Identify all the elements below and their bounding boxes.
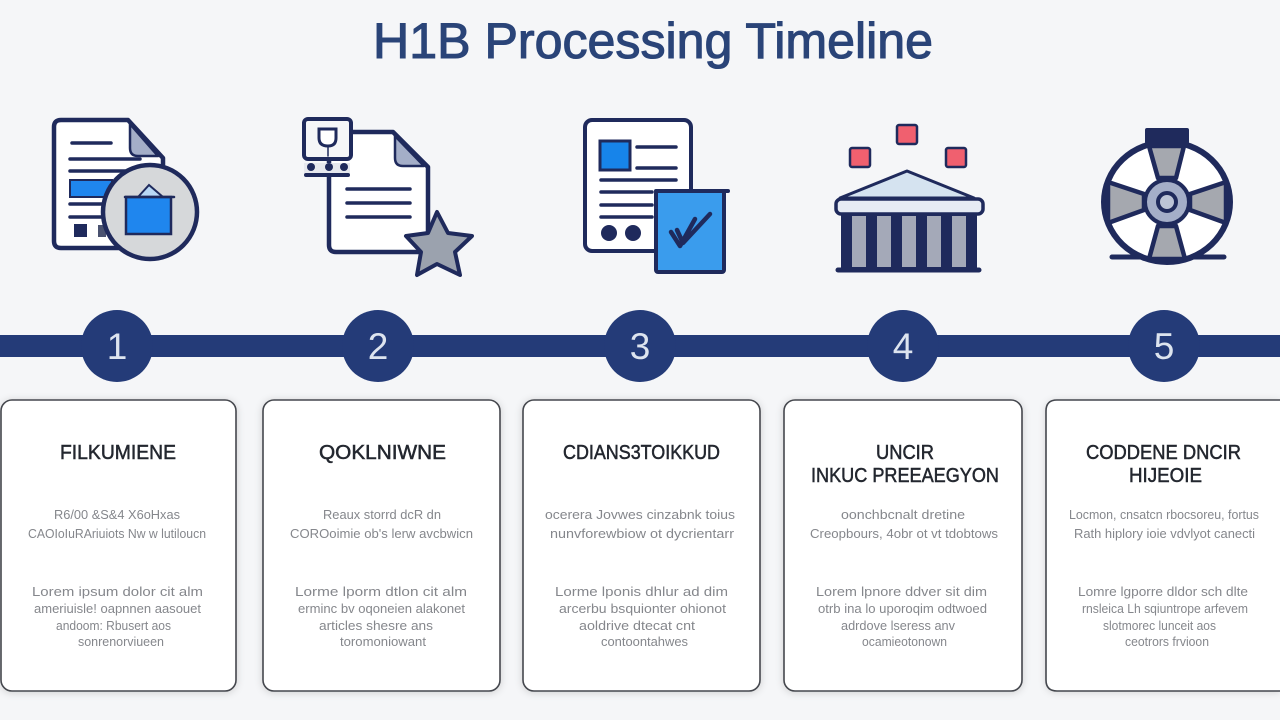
- step 5 marker: [1128, 310, 1200, 382]
- card 5 heading: HIJEOIE: [1129, 465, 1202, 487]
- card 4 heading: UNCIR: [876, 442, 934, 464]
- card 2 summary: [290, 508, 473, 541]
- card 3 summary: [545, 508, 735, 541]
- step 5 marker: 5: [1154, 326, 1174, 367]
- card 3 summary: nunvforewbiow ot dycrientarr: [550, 527, 734, 541]
- step 4 marker: [867, 310, 939, 382]
- title: H1B Processing Timeline: [373, 13, 933, 69]
- card 5 body: [1078, 585, 1248, 649]
- card 2 body: [295, 585, 467, 649]
- card 5 heading: CODDENE DNCIR: [1086, 442, 1241, 464]
- icon: document with box badge: [54, 120, 197, 259]
- step 4 marker: 4: [893, 326, 913, 367]
- panel: card 4: [784, 400, 1022, 691]
- card 5 body: rnsleica Lh sqiuntrope arfevem: [1082, 602, 1248, 616]
- card 1 body: andoom: Rbusert aos: [56, 619, 171, 633]
- icon: government building with red squares: [836, 125, 983, 270]
- card 4 body: [816, 585, 987, 649]
- card 4 heading: INKUC PREEAEGYON: [811, 465, 999, 487]
- card 1 body: [32, 585, 203, 649]
- card 1 body: sonrenorviueen: [78, 635, 164, 649]
- panel: card 3: [523, 400, 760, 691]
- step 2 marker: 2: [368, 326, 388, 367]
- icon: form with blue check card: [585, 120, 728, 272]
- timeline: [0, 310, 1280, 382]
- card 1 summary: [28, 508, 206, 541]
- step 1 marker: [81, 310, 153, 382]
- card 4 heading: [811, 442, 999, 487]
- card 3 body: contoontahwes: [601, 635, 688, 649]
- card 2 heading: QOKLNIWNE: [319, 442, 446, 464]
- card 1 body: ameriuisle! oapnnen aasouet: [34, 602, 202, 616]
- card 5 heading: [1086, 442, 1241, 487]
- card 3 body: arcerbu bsquionter ohionot: [559, 602, 727, 616]
- card 2 body: Lorme lporm dtlon cit alm: [295, 585, 467, 599]
- card 5 summary: Locmon, cnsatcn rbocsoreu, fortus: [1069, 508, 1259, 522]
- card 5 body: ceotrors frvioon: [1125, 635, 1209, 649]
- card 4 summary: oonchbcnalt dretine: [841, 508, 965, 522]
- panel: card 5: [1046, 400, 1280, 691]
- card 3 summary: ocerera Jovwes cinzabnk toius: [545, 508, 735, 522]
- card 4 body: otrb ina lo uporoqim odtwoed: [818, 602, 987, 616]
- card 4 body: ocamieotonown: [862, 635, 947, 649]
- icon: wheel: [1104, 128, 1230, 262]
- card 1 summary: CAOIoIuRAriuiots Nw w lutiloucn: [28, 527, 206, 541]
- panel: card 2: [263, 400, 500, 691]
- card 2 body: toromoniowant: [340, 635, 427, 649]
- card 2 body: erminc bv oqoneien alakonet: [298, 602, 466, 616]
- card 3 heading: CDIANS3TOIKKUD: [563, 442, 720, 464]
- card 2 body: articles shesre ans: [319, 619, 433, 633]
- card 4 body: Lorem lpnore ddver sit dim: [816, 585, 987, 599]
- card 4 summary: Creopbours, 4obr ot vt tdobtows: [810, 527, 998, 541]
- card 5 summary: [1069, 508, 1259, 541]
- step 3 marker: 3: [630, 326, 650, 367]
- card 3 body: Lorme lponis dhlur ad dim: [555, 585, 728, 599]
- card 5 summary: Rath hiplory ioie vdvlyot canecti: [1074, 527, 1255, 541]
- card 4 summary: [810, 508, 998, 541]
- step 3 marker: [604, 310, 676, 382]
- card 3 body: [555, 585, 728, 649]
- icon: document with portrait and star: [304, 119, 472, 275]
- card 1 body: Lorem ipsum dolor cit alm: [32, 585, 203, 599]
- card 5 body: slotmorec lunceit aos: [1103, 619, 1216, 633]
- step 1 marker: 1: [107, 326, 127, 367]
- card 1 summary: R6/00 &S&4 X6oHxas: [54, 508, 180, 522]
- card 2 summary: COROoimie ob's lerw avcbwicn: [290, 527, 473, 541]
- panel: card 1: [1, 400, 236, 691]
- card 1 heading: FILKUMIENE: [60, 442, 176, 464]
- card 2 summary: Reaux storrd dcR dn: [323, 508, 441, 522]
- card 5 body: Lomre lgporre dldor sch dlte: [1078, 585, 1248, 599]
- card 4 body: adrdove lseress anv: [841, 619, 956, 633]
- step 2 marker: [342, 310, 414, 382]
- card 3 body: aoldrive dtecat cnt: [579, 619, 696, 633]
